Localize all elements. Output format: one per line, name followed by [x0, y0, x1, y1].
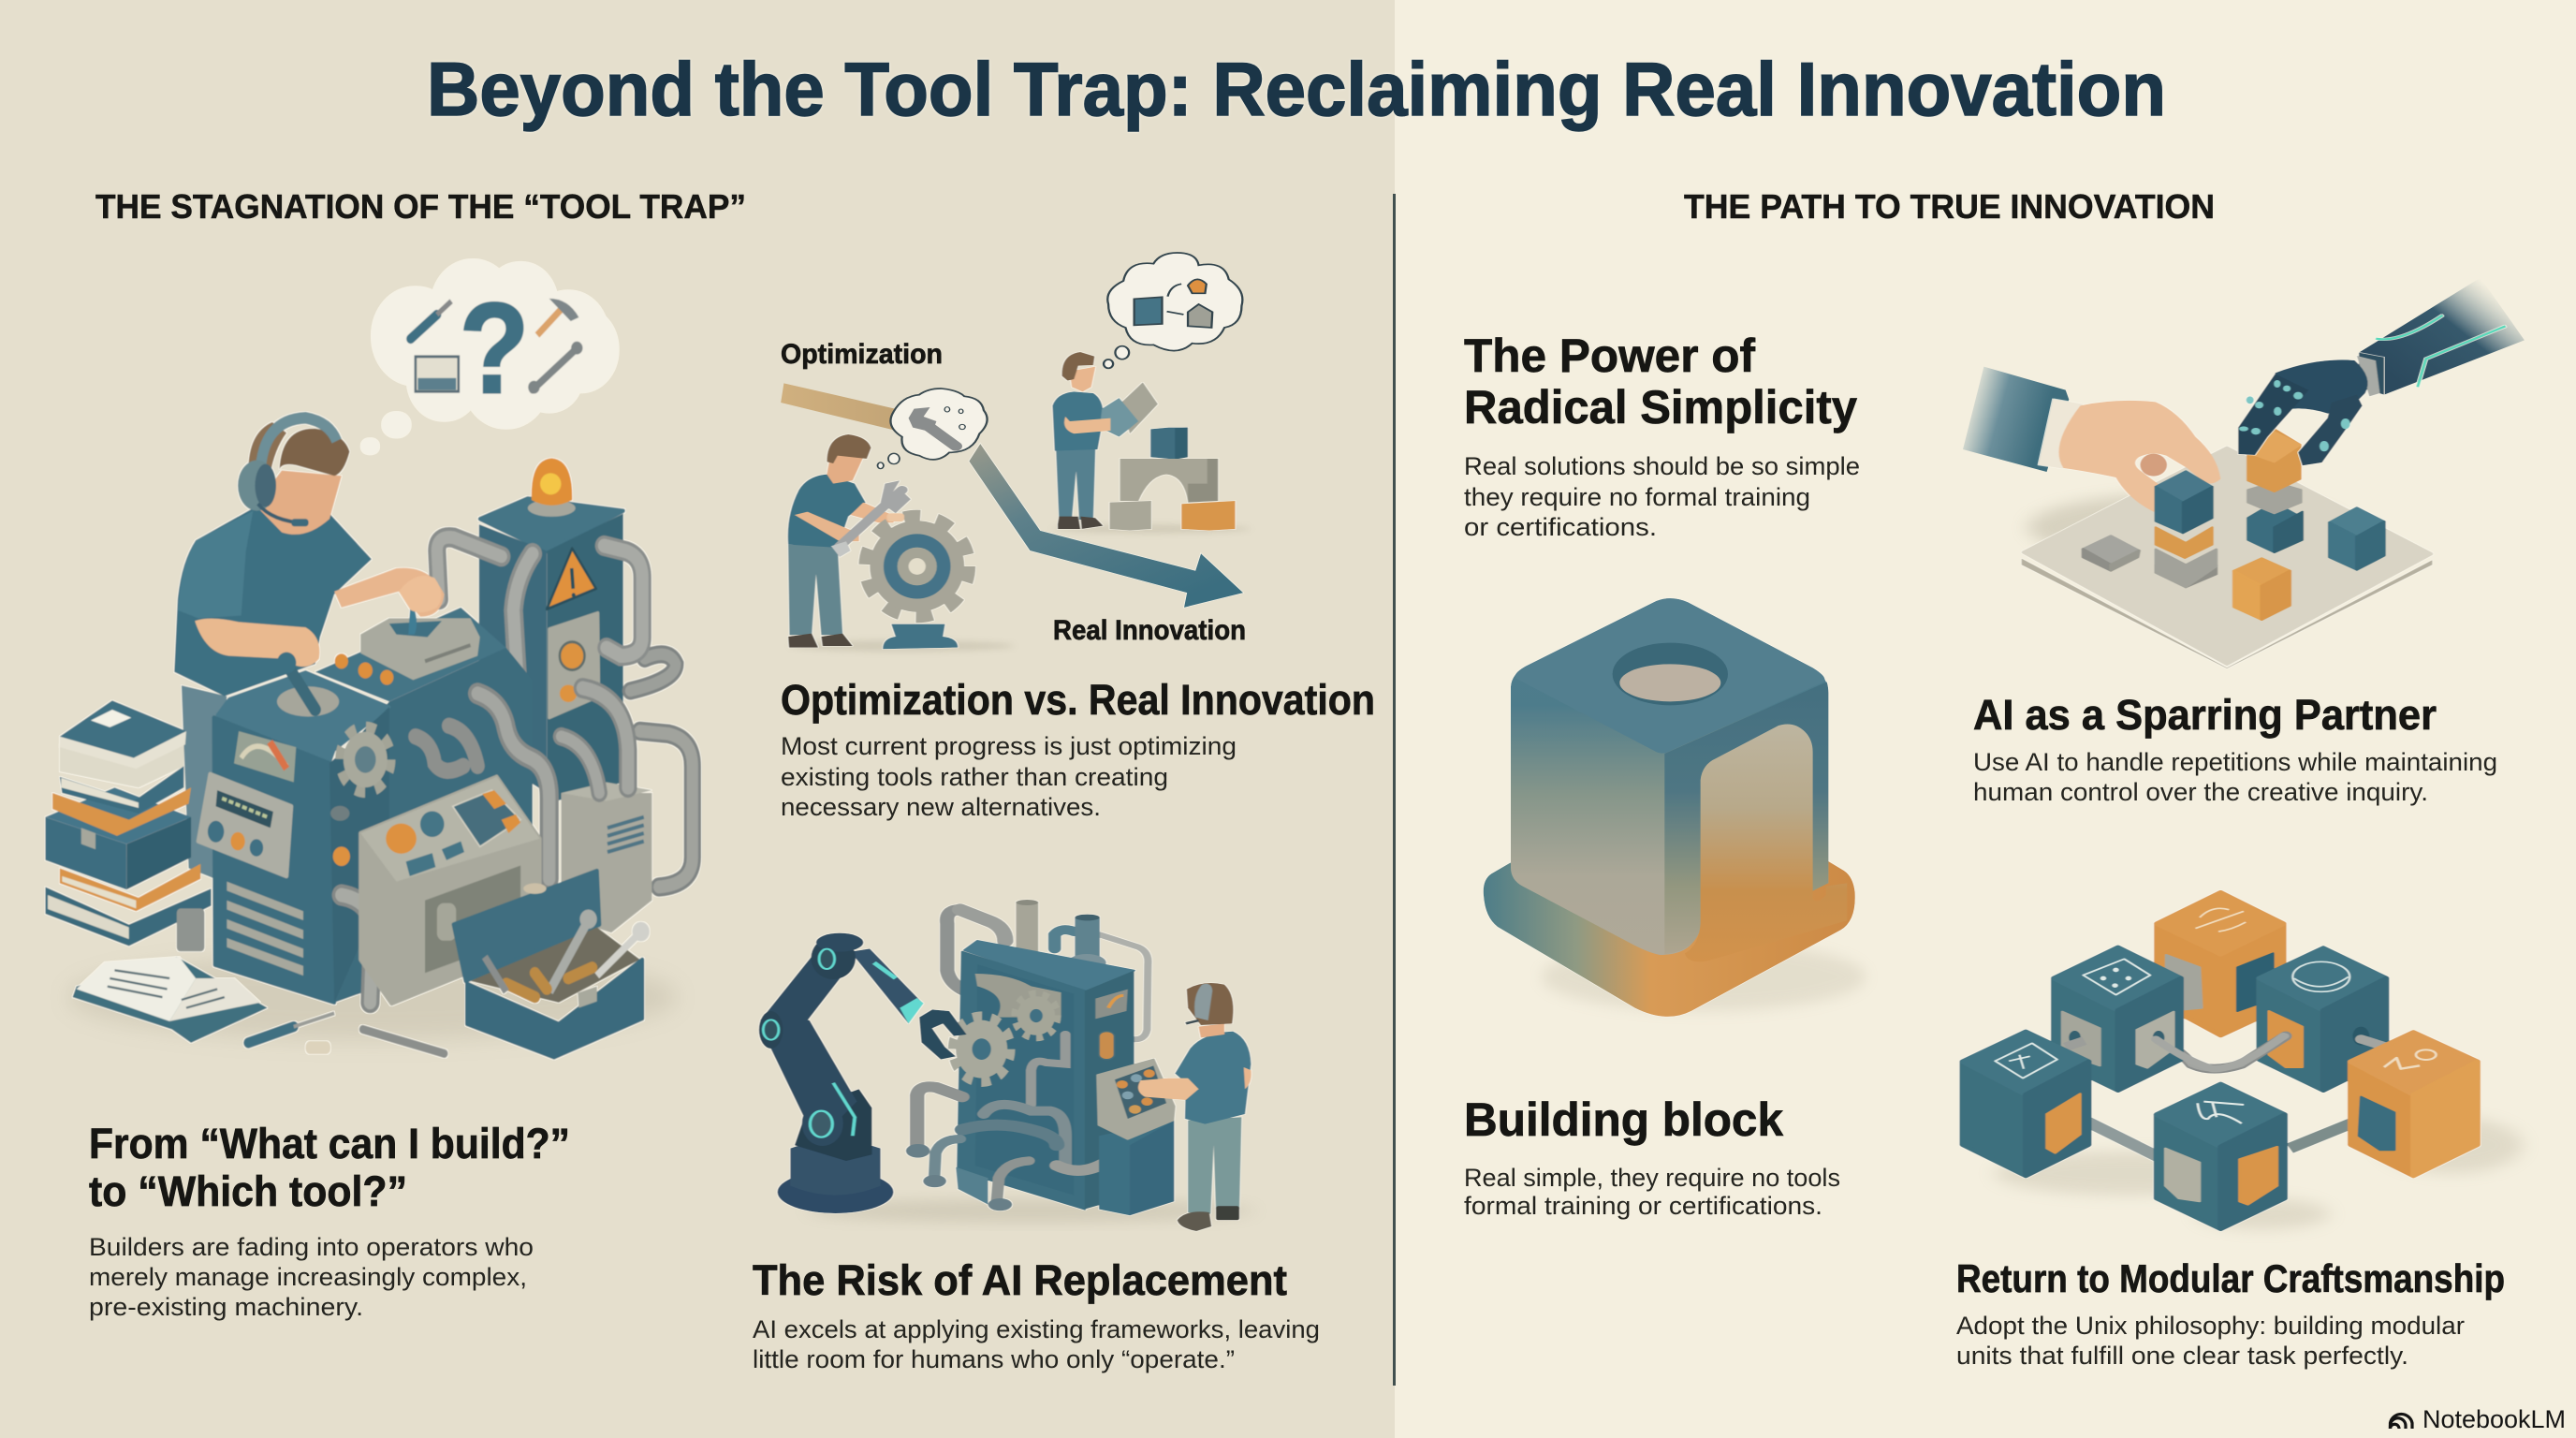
body copy [1464, 1164, 1840, 1220]
pipe ends [906, 1144, 1012, 1211]
heading: The Power of [1464, 330, 1755, 382]
heading: From “What can I build?” [89, 1120, 570, 1167]
body copy: Builders are fading into operators who [89, 1233, 534, 1261]
body copy: necessary new alternatives. [781, 793, 1101, 821]
NotebookLM logo [2391, 1405, 2566, 1433]
body copy: existing tools rather than creating [781, 763, 1168, 791]
front right orange cube [2350, 1033, 2478, 1176]
grey control console [360, 777, 540, 1004]
machine internal pipes [917, 1034, 1110, 1203]
back orange cube [2157, 892, 2283, 1035]
stacking artwork [1963, 278, 2525, 668]
body copy [1464, 452, 1860, 541]
hand over switch [399, 576, 441, 612]
gear on machine [341, 728, 390, 791]
operator body [174, 418, 444, 879]
background: left panel [0, 0, 1395, 1438]
body copy [1973, 748, 2497, 806]
teal lone block [2330, 508, 2384, 569]
heading: Building block [1464, 1093, 1783, 1146]
illustration: connected modular cubes [1963, 892, 2523, 1229]
text block: radical simplicity [1464, 330, 1860, 541]
background: right panel [1395, 0, 2576, 1438]
tower machine [958, 941, 1134, 1210]
back pipes [437, 537, 693, 887]
robot hand [2238, 315, 2506, 465]
heading: Radical Simplicity [1464, 381, 1857, 433]
body copy: Real simple, they require no tools [1464, 1164, 1840, 1192]
modular cubes artwork [1963, 892, 2478, 1229]
body copy [89, 1233, 534, 1321]
thought cloud: wrench [878, 389, 988, 469]
back right teal cube [2260, 948, 2386, 1091]
left stack [2156, 471, 2217, 587]
text block: risk of AI replacement [753, 1256, 1320, 1373]
display panel [198, 774, 350, 876]
heading: to “Which tool?” [89, 1167, 407, 1215]
heading [89, 1120, 570, 1215]
front left teal cube [1963, 1032, 2088, 1176]
illustration: robot arm and operator at machine [759, 900, 1254, 1231]
title: Beyond the Tool Trap: Reclaiming Real Innovation [427, 48, 2166, 132]
front machine block [214, 672, 389, 1003]
switch housing [360, 599, 480, 680]
top pipes [947, 910, 1148, 1039]
rod joint [2156, 1036, 2283, 1069]
body copy [753, 1315, 1320, 1373]
body copy: Use AI to handle repetitions while maintaining [1973, 748, 2497, 776]
fading robot forearm [2359, 278, 2525, 395]
body copy: human control over the creative inquiry. [1973, 778, 2428, 806]
console stand [1098, 1060, 1174, 1215]
center divider [1393, 194, 1396, 1386]
label: Real Innovation: Real Innovation [1053, 615, 1246, 646]
sliding tab [1685, 724, 1847, 961]
back left teal cube [2054, 947, 2181, 1091]
tan optimization band [781, 383, 902, 430]
machine artwork [759, 900, 1251, 1231]
top face [1515, 598, 1824, 754]
wrench and gear [831, 480, 968, 649]
block artwork [1484, 598, 1855, 1017]
body copy: formal training or certifications. [1464, 1192, 1822, 1220]
thought cloud: blocks [1104, 253, 1242, 368]
block shadow [1542, 943, 1866, 1011]
heading: Return to Modular Craftsmanship [1956, 1256, 2505, 1300]
right stack [2247, 429, 2303, 552]
illustration: simple rounded building block [1484, 598, 1866, 1017]
heading [1464, 330, 1857, 433]
machine gears [953, 994, 1057, 1081]
human hand and cuff [2039, 399, 2220, 512]
text block: return to modular craftsmanship [1956, 1256, 2505, 1370]
fading human sleeve [1963, 367, 2069, 472]
front center teal cube [2157, 1084, 2285, 1229]
warning tower [479, 458, 623, 803]
text block: building block [1464, 1093, 1840, 1220]
builder with blocks [788, 352, 1236, 649]
lever and top buttons [277, 653, 393, 716]
flat grey block [2083, 536, 2139, 570]
body copy: units that fulfill one clear task perfectly. [1956, 1342, 2408, 1370]
rod short [2066, 1041, 2085, 1047]
middle machine body [315, 608, 533, 1003]
floor shadow [808, 1199, 1254, 1222]
robot arm [759, 933, 967, 1213]
operator and machine artwork [45, 259, 693, 1057]
circle inset [1619, 664, 1720, 701]
base board and hands [2022, 399, 2432, 668]
body copy: merely manage increasingly complex, [89, 1263, 527, 1291]
body right face [1664, 682, 1828, 954]
heading: Optimization vs. Real Innovation [781, 676, 1375, 724]
section heading: true innovation: THE PATH TO TRUE INNOVATION [1684, 187, 2215, 226]
section heading: tool trap: THE STAGNATION OF THE “TOOL TRAP” [95, 187, 746, 226]
worker figure [788, 434, 896, 648]
front pipes [342, 688, 628, 1003]
body left face [1511, 598, 1828, 955]
body copy: pre-existing machinery. [89, 1293, 363, 1321]
illustration: optimization vs real innovation [781, 253, 1251, 652]
cloud tool icons [411, 299, 582, 393]
body copy: Adopt the Unix philosophy: building modular [1956, 1312, 2465, 1340]
logo arcs icon [2391, 1414, 2412, 1429]
chimneys [1016, 900, 1106, 972]
open manual and floor tools [73, 908, 444, 1054]
base plate [1484, 861, 1855, 1017]
connecting rods [2085, 1036, 2386, 1161]
heading: AI as a Sparring Partner [1973, 691, 2437, 739]
body copy: little room for humans who only “operate.” [753, 1345, 1235, 1373]
body copy [781, 732, 1237, 821]
illustration: human and AI hands stacking blocks [1963, 278, 2525, 668]
text block: from what can I build [89, 1120, 570, 1321]
builder's legs and torso [1052, 352, 1158, 529]
body copy: AI excels at applying existing frameworks, leaving [753, 1315, 1320, 1343]
grey side box [561, 782, 651, 932]
board shadow [2027, 493, 2347, 562]
floor shadows [790, 524, 1251, 652]
orange lone block [2234, 559, 2290, 620]
body copy: or certifications. [1464, 513, 1657, 541]
toolbox [454, 871, 650, 1057]
body copy: they require no formal training [1464, 483, 1810, 511]
machine ground shadow [66, 954, 678, 1040]
cube shadows [1995, 1117, 2523, 1229]
recessed circle [1613, 643, 1728, 705]
text block: AI as a sparring partner [1973, 691, 2497, 806]
label: Optimization: Optimization [781, 339, 943, 370]
body copy [1956, 1312, 2465, 1370]
stone arch and blocks [1109, 428, 1236, 531]
declining arrow [969, 443, 1244, 608]
illustration: operator at complex machine [45, 259, 693, 1057]
machine vents [227, 882, 303, 976]
machine base [956, 1167, 988, 1205]
thought cloud [361, 259, 619, 454]
logo wordmark: NotebookLM [2422, 1405, 2566, 1433]
question mark: ? [460, 276, 529, 420]
text block: optimization vs real innovation [781, 676, 1375, 821]
body copy: Most current progress is just optimizing [781, 732, 1237, 760]
operator with headset [1138, 983, 1251, 1231]
heading: The Risk of AI Replacement [753, 1256, 1287, 1304]
stacked books [45, 700, 212, 946]
body copy: Real solutions should be so simple [1464, 452, 1860, 480]
